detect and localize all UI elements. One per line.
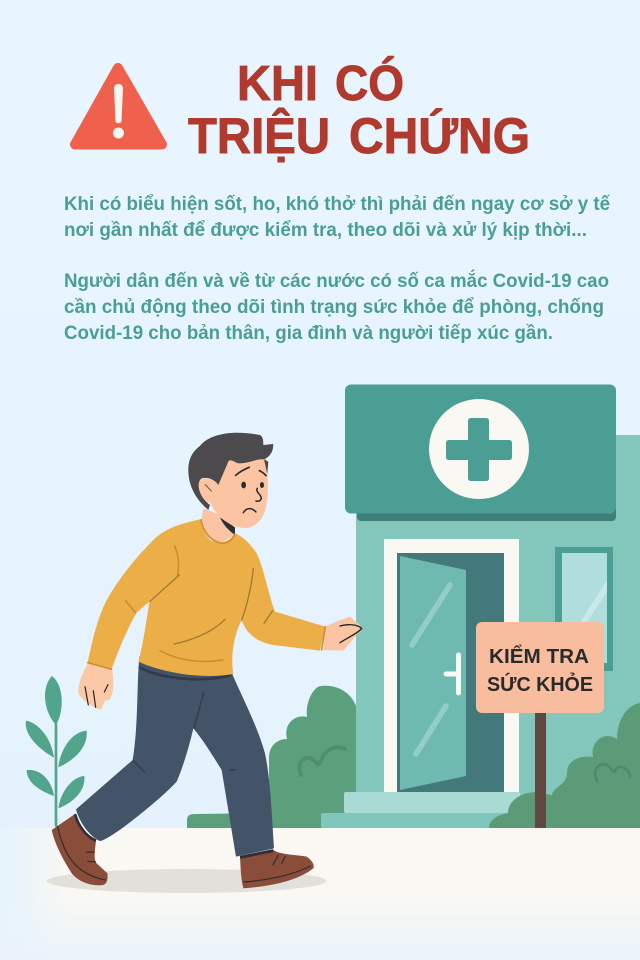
building: health clinic	[321, 384, 640, 828]
icon: medical cross	[429, 399, 529, 499]
text block: symptoms advice	[64, 194, 610, 241]
icon: warning triangle	[75, 68, 162, 144]
text block: travellers advice	[64, 270, 609, 344]
title: CÓ	[335, 56, 404, 111]
ground shadow	[46, 869, 326, 893]
text block: travellers advice: cần chủ động theo dõi tình trạng sức khỏe để phòng, chống	[64, 297, 604, 318]
text block: symptoms advice: nơi gần nhất để được kiểm tra, theo dõi và xử lý kịp thời...	[64, 220, 587, 241]
sign: health check	[476, 622, 604, 828]
steps	[321, 792, 521, 828]
text block: symptoms advice: Khi có biểu hiện sốt, ho, khó thở thì phải đến ngay cơ sở y tế	[64, 194, 610, 215]
text block: travellers advice: Covid-19 cho bản thân, gia đình và người tiếp xúc gần.	[64, 323, 553, 344]
torso and head	[88, 433, 362, 676]
title: CHỨNG	[349, 108, 530, 164]
person walking	[52, 433, 362, 888]
text block: travellers advice: Người dân đến và về từ các nước có số ca mắc Covid-19 cao	[64, 270, 609, 292]
bush: right of building	[489, 703, 640, 828]
title: TRIỆU	[188, 108, 330, 164]
title: KHI	[237, 57, 318, 111]
legs and shoes	[52, 657, 314, 888]
roof shadow	[357, 505, 616, 521]
sign: health check: SỨC KHỎE	[487, 672, 593, 696]
bush: left of building	[187, 686, 356, 828]
plant	[26, 676, 87, 827]
sign: health check: KIỂM TRA	[489, 645, 589, 668]
title	[188, 56, 530, 164]
door	[384, 539, 519, 793]
roof sign panel	[345, 384, 616, 514]
ground	[0, 828, 640, 960]
window	[555, 547, 613, 671]
